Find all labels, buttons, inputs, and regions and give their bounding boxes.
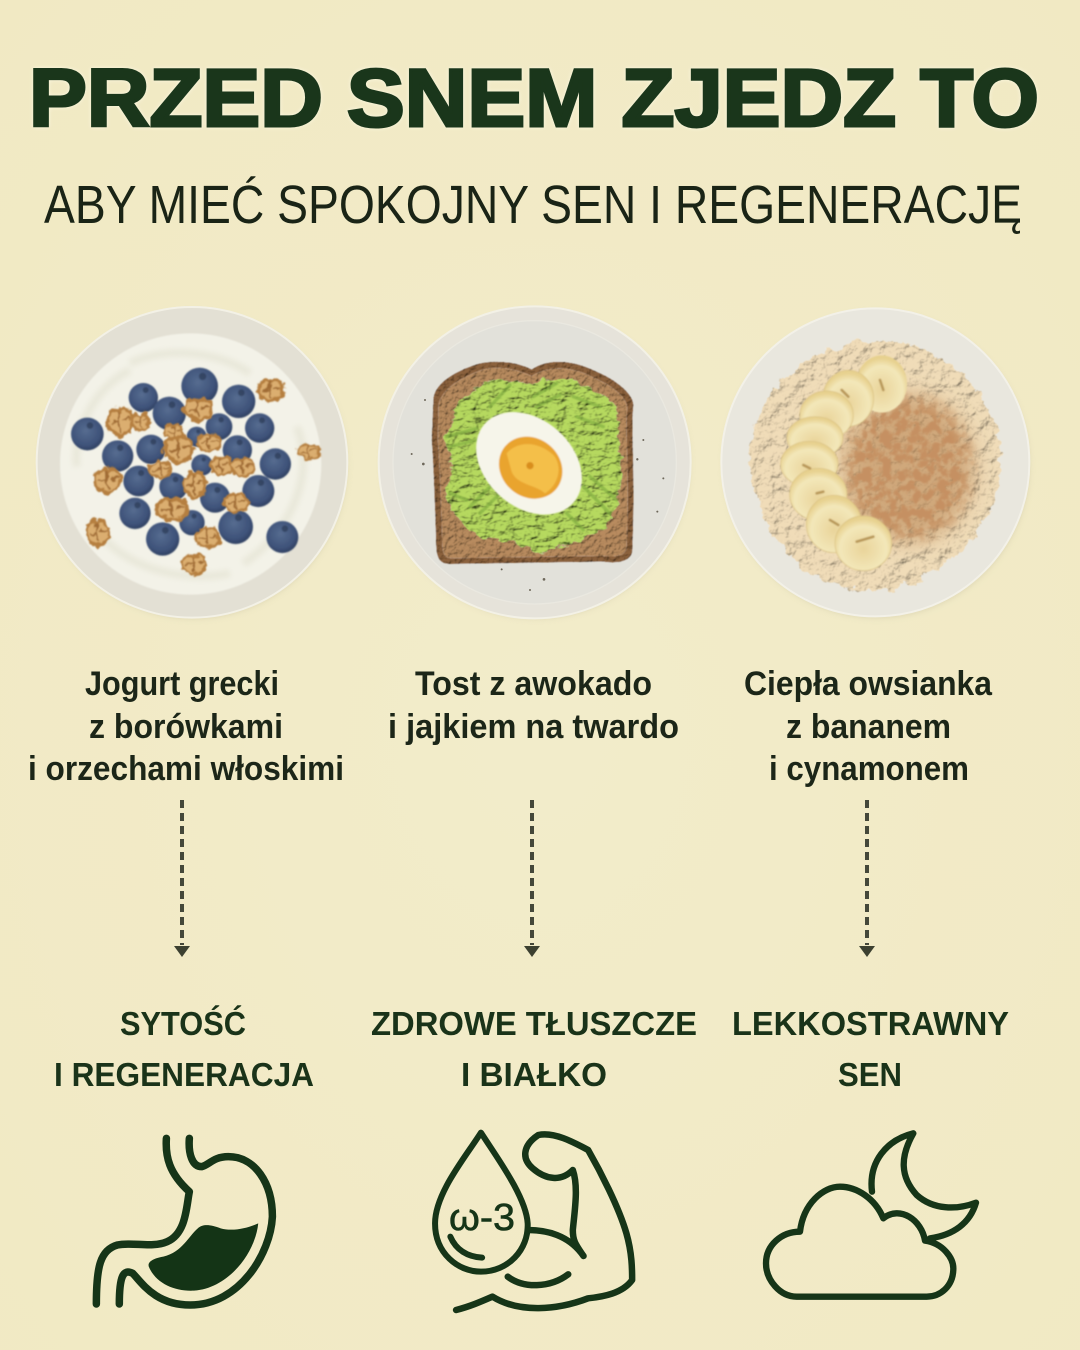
benefit: light sleep: SEN — [838, 1056, 902, 1093]
plate speckles — [411, 399, 664, 591]
food label: toast — [388, 665, 679, 746]
avocado ridges — [447, 383, 617, 530]
arrow 1 — [174, 800, 190, 957]
benefit: satiety: I REGENERACJA — [54, 1056, 314, 1093]
food label: oatmeal: z bananem — [786, 708, 951, 746]
benefit: light sleep — [732, 1005, 1009, 1093]
food label: toast: Tost z awokado — [415, 665, 652, 703]
benefit: satiety — [54, 1005, 314, 1093]
food label: oatmeal: i cynamonem — [769, 750, 969, 788]
blueberries — [71, 368, 298, 556]
icon: stomach — [96, 1138, 272, 1305]
egg — [456, 391, 602, 535]
icon: omega-3 drop and flexed arm — [435, 1133, 632, 1310]
photo: yogurt bowl — [37, 307, 347, 619]
benefit: light sleep: LEKKOSTRAWNY — [732, 1005, 1009, 1042]
walnuts — [85, 377, 320, 576]
title: PRZED SNEM ZJEDZ TO — [29, 53, 1039, 144]
benefit: fats and protein — [371, 1005, 697, 1093]
toast — [432, 362, 634, 564]
benefit: fats and protein: ZDROWE TŁUSZCZE — [371, 1005, 697, 1042]
photo: avocado toast plate — [379, 306, 691, 619]
avocado — [445, 378, 623, 553]
photo: oatmeal bowl — [721, 308, 1030, 618]
benefit: satiety: SYTOŚĆ — [120, 1005, 246, 1042]
banana slices — [781, 355, 907, 571]
cinnamon — [843, 395, 973, 542]
food label: yogurt: Jogurt grecki — [85, 665, 279, 703]
arrow 2 — [524, 800, 540, 957]
oatmeal — [749, 340, 1001, 591]
benefit: fats and protein: I BIAŁKO — [461, 1056, 607, 1093]
arrow 3 — [859, 800, 875, 957]
icon: omega-3 drop and flexed arm: ω-3 — [449, 1197, 515, 1239]
food label: oatmeal: Ciepła owsianka — [744, 665, 993, 703]
food label: yogurt: i orzechami włoskimi — [28, 750, 344, 788]
food label: yogurt: z borówkami — [89, 708, 283, 746]
icon: cloud and moon — [766, 1133, 976, 1297]
food label: yogurt — [28, 665, 344, 788]
food label: toast: i jajkiem na twardo — [388, 708, 679, 746]
food label: oatmeal — [744, 665, 993, 788]
